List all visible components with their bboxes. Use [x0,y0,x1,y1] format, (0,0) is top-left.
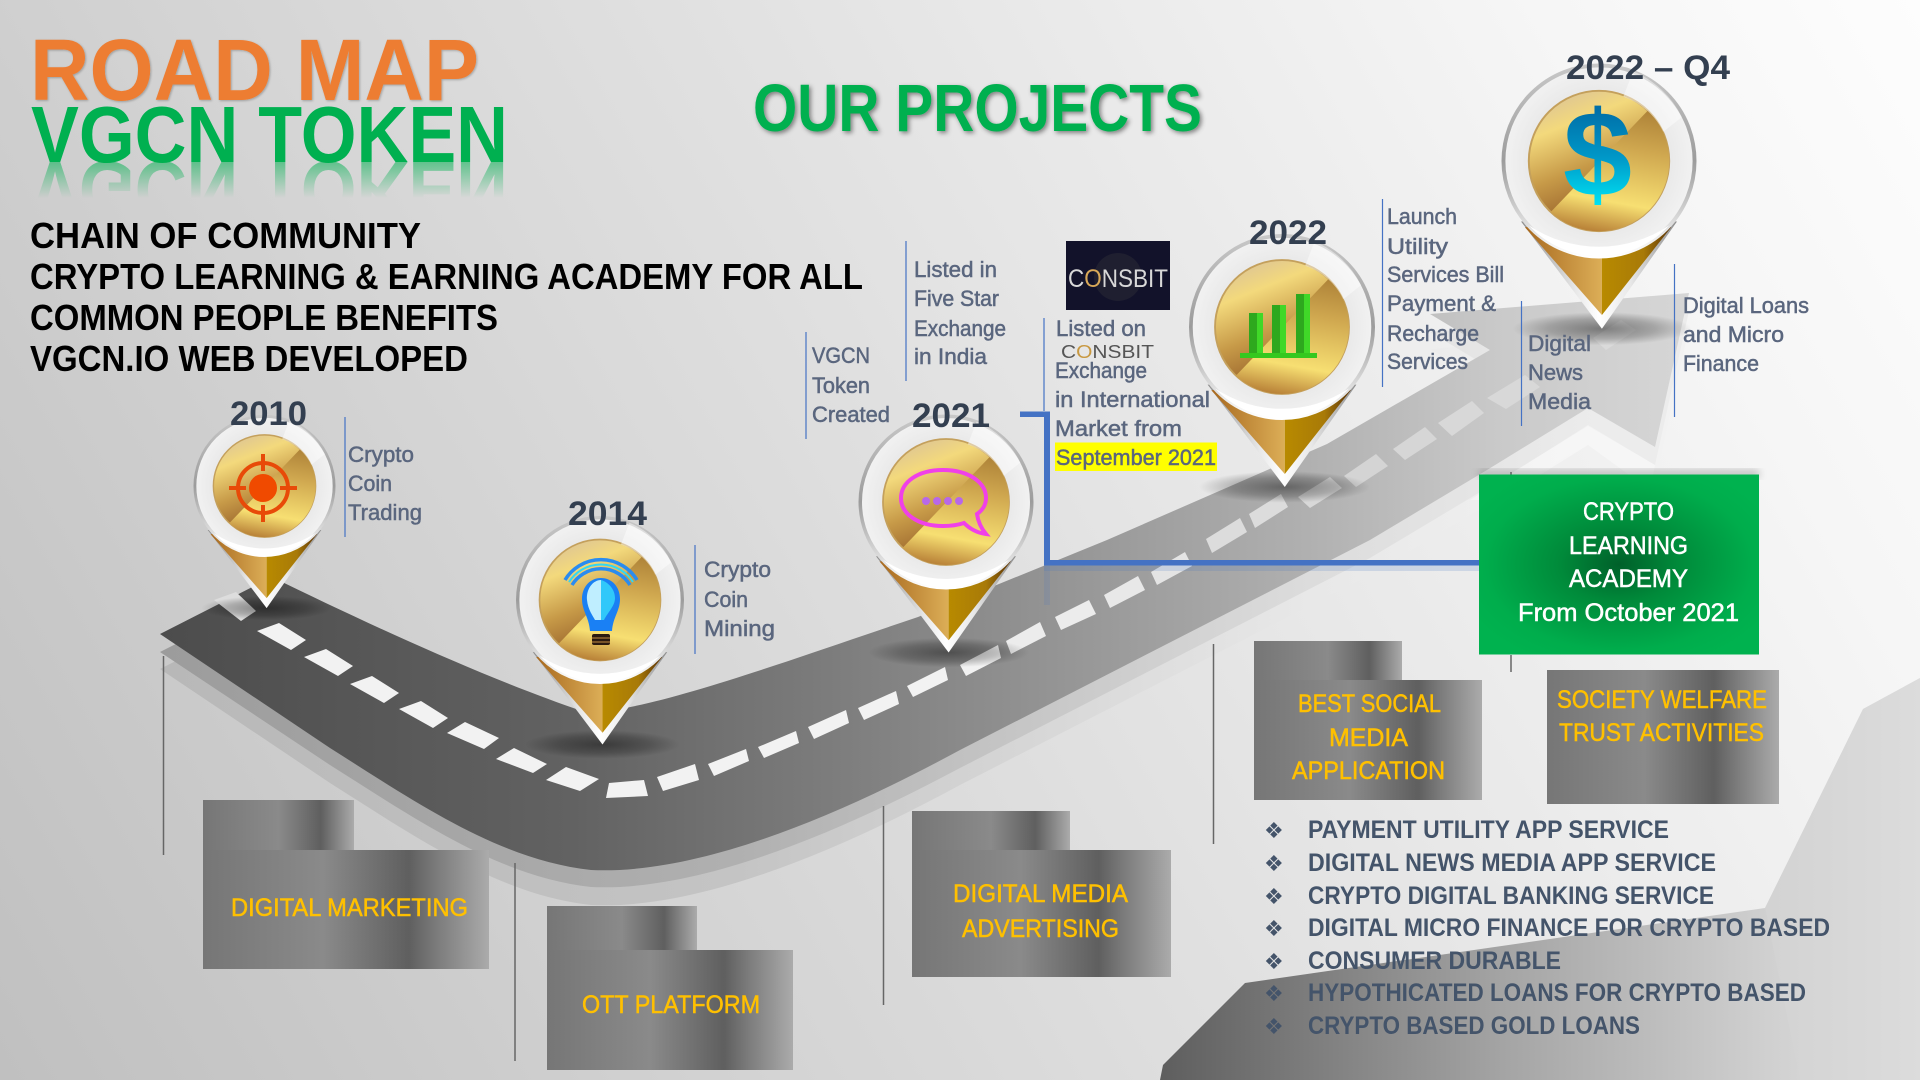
label: launch utility services: Services Bill [1387,262,1504,287]
panel: digital media advertising: ADVERTISING [962,915,1119,943]
panel: best social media application: APPLICATION [1292,757,1445,785]
label: listed in five star exchange: in India [914,344,988,369]
label: vgcn token created: VGCN [812,343,870,368]
road dashes [214,320,1636,798]
milestone 2014 [518,495,775,759]
panel: crypto learning academy: From October 2021 [1518,599,1739,627]
title: vgcn token: VGCN TOKEN [31,90,508,179]
panel: digital media advertising: DIGITAL MEDIA [953,880,1128,908]
year 2010: 2010 [230,395,307,433]
label: launch utility services: Launch [1387,204,1457,229]
panel: ott platform [547,906,793,1070]
connector lines [164,472,1511,1061]
label: digital news media: News [1528,360,1583,385]
milestone 2010 [195,395,422,620]
label: launch utility services [1382,199,1504,387]
arrow chevrons [1470,425,1655,500]
label: listed on consbit: Listed on [1056,316,1146,341]
title: vgcn token [32,106,504,196]
label: digital loans: Finance [1683,351,1759,376]
bullet list of services [1264,816,1830,1040]
bullet list of services: ❖ [1264,917,1284,942]
pin 2022 q4 [1503,65,1696,345]
label: crypto coin trading [345,417,422,537]
milestone 2022 q4 [1503,49,1809,426]
label: vgcn token created [806,332,890,439]
label: digital loans [1674,264,1809,417]
title: vgcn token: VGCN TOKEN [31,145,508,234]
panel: best social media application: MEDIA [1329,724,1408,752]
pin 2022 [1191,236,1375,503]
bullet list of services: ❖ [1264,982,1284,1007]
label: listed on consbit: Exchange [1055,358,1147,383]
icon: bar chart [1240,294,1317,358]
bullet list of services: CRYPTO DIGITAL BANKING SERVICE [1308,882,1714,910]
intro text block: COMMON PEOPLE BENEFITS [30,297,498,338]
pin 2021 [860,416,1034,667]
title: road map: ROAD MAP [30,22,479,119]
milestone 2022 [1191,199,1504,503]
panel: crypto learning academy: LEARNING [1569,532,1688,560]
panel: society welfare trust activities: TRUST ACTIVITIES [1559,719,1764,747]
blue connector to academy [1020,412,1479,605]
year 2022: 2022 [1249,214,1327,252]
year 2014: 2014 [568,495,647,533]
label: digital loans: and Micro [1683,322,1784,347]
logo: consbit: CONSBIT [1068,265,1168,293]
label: digital news media [1522,301,1592,426]
label: crypto coin mining [695,545,775,654]
panel: society welfare trust activities: SOCIETY WELFARE [1557,686,1767,714]
bullet list of services: CONSUMER DURABLE [1308,947,1561,975]
label: crypto coin mining: Crypto [704,557,771,582]
pin 2014 [518,518,684,759]
label: listed in five star exchange: Five Star [914,286,999,311]
panel: best social media application: BEST SOCIAL [1298,690,1441,718]
panel: best social media application [1254,641,1482,800]
icon: dollar sign: $ [1563,86,1632,222]
label: crypto coin trading: Coin [348,471,392,496]
year 2021: 2021 [912,397,990,435]
bullet list of services: ❖ [1264,1015,1284,1040]
label: vgcn token created: Token [812,373,870,398]
label: crypto coin mining: Coin [704,587,748,612]
bullet list of services: DIGITAL NEWS MEDIA APP SERVICE [1308,849,1716,877]
label: vgcn token created: Created [812,402,890,427]
label: launch utility services: Recharge [1387,321,1479,346]
label: listed on consbit: September 2021 [1056,445,1216,470]
label: launch utility services: Payment & [1387,291,1496,316]
label: listed on consbit [1044,316,1217,471]
intro text block: CHAIN OF COMMUNITY [30,215,421,256]
panel: digital media advertising [912,811,1171,977]
panel: society welfare trust activities [1547,670,1779,804]
label: listed in five star exchange: Exchange [914,316,1006,341]
intro text block: CRYPTO LEARNING & EARNING ACADEMY FOR ALL [30,256,863,297]
bullet list of services: ❖ [1264,885,1284,910]
label: listed in five star exchange [906,241,1006,381]
bullet list of services: CRYPTO BASED GOLD LOANS [1308,1012,1640,1040]
panel: crypto learning academy [1479,470,1759,654]
pin 2010 [195,416,336,620]
intro text block [30,215,863,379]
bullet list of services: ❖ [1264,852,1284,877]
logo: consbit [1066,241,1170,310]
bullet list of services: HYPOTHICATED LOANS FOR CRYPTO BASED [1308,979,1806,1007]
panel: crypto learning academy: ACADEMY [1569,565,1688,593]
label: listed in five star exchange: Listed in [914,257,997,282]
label: crypto coin mining: Mining [704,616,775,641]
label: digital news media: Media [1528,389,1592,414]
label: launch utility services: Utility [1387,234,1448,259]
bullet list of services: ❖ [1264,950,1284,975]
bullet list of services: ❖ [1264,819,1284,844]
label: crypto coin trading: Crypto [348,442,414,467]
road with arrow [160,293,1689,905]
bullet list of services: PAYMENT UTILITY APP SERVICE [1308,816,1669,844]
milestone 2021 [806,241,1217,667]
label: crypto coin trading: Trading [348,500,422,525]
bullet list of services: DIGITAL MICRO FINANCE FOR CRYPTO BASED [1308,914,1830,942]
icon: chat bubble [901,470,986,534]
background mountain shape [1160,678,1920,1080]
panel: digital marketing: DIGITAL MARKETING [231,894,468,922]
label: digital news media: Digital [1528,331,1591,356]
year 2022 q4: 2022 – Q4 [1566,49,1730,87]
icon: target [229,454,297,522]
label: listed on consbit: in International [1055,387,1210,412]
icon: light bulb with signal [565,560,637,645]
panel: crypto learning academy: CRYPTO [1583,498,1674,526]
label: launch utility services: Services [1387,349,1468,374]
panel: digital marketing [203,800,489,969]
panel: ott platform: OTT PLATFORM [582,991,760,1019]
heading: our projects: OUR PROJECTS [753,71,1202,146]
label: listed on consbit: Market from [1055,416,1182,441]
label: listed on consbit: CONSBIT [1061,342,1154,362]
intro text block: VGCN.IO WEB DEVELOPED [30,338,468,379]
label: digital loans: Digital Loans [1683,293,1809,318]
